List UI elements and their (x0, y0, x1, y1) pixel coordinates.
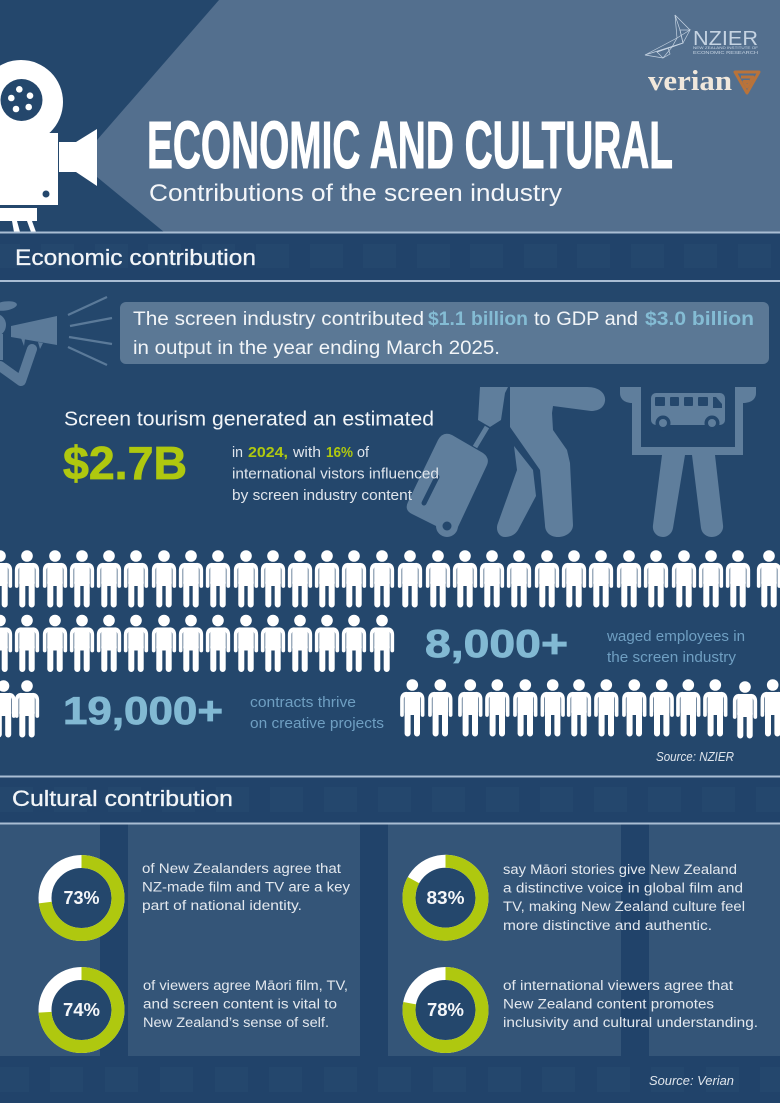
text: tourism detail: 2024, (248, 445, 288, 461)
text: contracts: on creative projects (250, 716, 384, 732)
text: sense of self: of viewers agree Māori film, TV, (143, 978, 348, 993)
source: Verian: Source: Verian (649, 1074, 734, 1088)
text: waged employees: waged employees in (606, 629, 745, 645)
logo: NZIER (645, 15, 759, 58)
text: tourism detail: of (357, 445, 370, 461)
text: tourism detail (232, 445, 439, 504)
text: national identity (142, 861, 350, 913)
text: distinctive voice: TV, making New Zealand culture feel (503, 899, 745, 914)
panel: cultural statistics (0, 824, 780, 1103)
logo: Verian (648, 66, 759, 97)
donut: 83%: 83% (426, 888, 464, 908)
donut: 78% (409, 974, 482, 1046)
subtitle: Contributions of the screen industry (149, 180, 562, 207)
logo: NZIER: ECONOMIC RESEARCH (693, 50, 758, 55)
text: tourism detail: by screen industry content (232, 488, 412, 504)
text: tourism detail: 16% (326, 445, 353, 461)
projector light beam (97, 0, 780, 232)
donut: 74%: 74% (63, 1000, 100, 1020)
text: national identity: part of national identity. (142, 898, 302, 913)
pictogram row 3 right: people (402, 679, 780, 736)
callout: GDP and output: The screen industry contributed (133, 309, 424, 330)
text: tourism detail: in (232, 445, 243, 461)
source: NZIER: Source: NZIER (656, 750, 734, 764)
section band: economic (0, 232, 780, 282)
section band: cultural (0, 776, 780, 824)
header panel (0, 0, 780, 232)
callout: GDP and output: in output in the year ending March 2025. (133, 338, 500, 359)
text: distinctive voice (503, 862, 745, 933)
text: distinctive voice: more distinctive and authentic. (503, 918, 712, 933)
logo: NZIER: NEW ZEALAND INSTITUTE OF (693, 45, 759, 50)
donut: 78%: 78% (427, 1000, 464, 1020)
text: tourism detail: international vistors influenced (232, 466, 439, 482)
stat: 8,000+: 8,000+ (425, 623, 568, 666)
text: sense of self: and screen content is vital to (143, 996, 337, 1012)
icon: person with megaphone (0, 297, 112, 381)
pictogram row 3 left: people (0, 680, 37, 734)
stat: $2.7B: $2.7B (63, 437, 187, 489)
donut: 83% (409, 861, 482, 934)
callout: GDP and output: $3.0 billion (645, 309, 754, 330)
text: contracts: contracts thrive (250, 695, 356, 711)
text: national identity: of New Zealanders agree that (142, 861, 341, 876)
text: national identity: NZ-made film and TV are a key (142, 880, 350, 894)
text: sense of self (143, 978, 348, 1030)
donut: 73% (45, 862, 118, 934)
heading: cultural contribution: Cultural contribution (12, 786, 233, 811)
text: inclusivity: inclusivity and cultural understanding. (503, 1015, 758, 1030)
stat: 19,000+: 19,000+ (63, 690, 223, 733)
icon: film camera (0, 60, 97, 232)
donut: 73%: 73% (64, 888, 100, 908)
text: inclusivity (503, 978, 758, 1030)
callout: GDP and output: $1.1 billion (428, 309, 528, 330)
icon: traveller with suitcase (407, 387, 605, 537)
text: contracts (250, 695, 384, 732)
text: screen tourism heading: Screen tourism generated an estimated (64, 408, 434, 430)
text: tourism detail: with (292, 445, 321, 461)
logo: Verian: verian (648, 66, 732, 97)
text: sense of self: New Zealand’s sense of self. (143, 1015, 329, 1030)
pictogram row 2: people (0, 615, 392, 669)
callout: GDP and output (120, 302, 769, 364)
donut: 74% (45, 974, 118, 1046)
icon: bus sign holder (620, 387, 756, 537)
text: distinctive voice: a distinctive voice in global film and (503, 880, 743, 896)
text: waged employees (606, 629, 745, 666)
text: inclusivity: New Zealand content promotes (503, 996, 714, 1012)
logo: NZIER: NZIER (693, 28, 758, 50)
heading: economic contribution: Economic contribution (15, 245, 256, 270)
text: waged employees: the screen industry (607, 650, 737, 666)
text: inclusivity: of international viewers agree that (503, 978, 733, 993)
callout: GDP and output: to GDP and (534, 309, 638, 330)
text: distinctive voice: say Māori stories give New Zealand (503, 862, 737, 877)
pictogram row 1: people (0, 550, 779, 604)
